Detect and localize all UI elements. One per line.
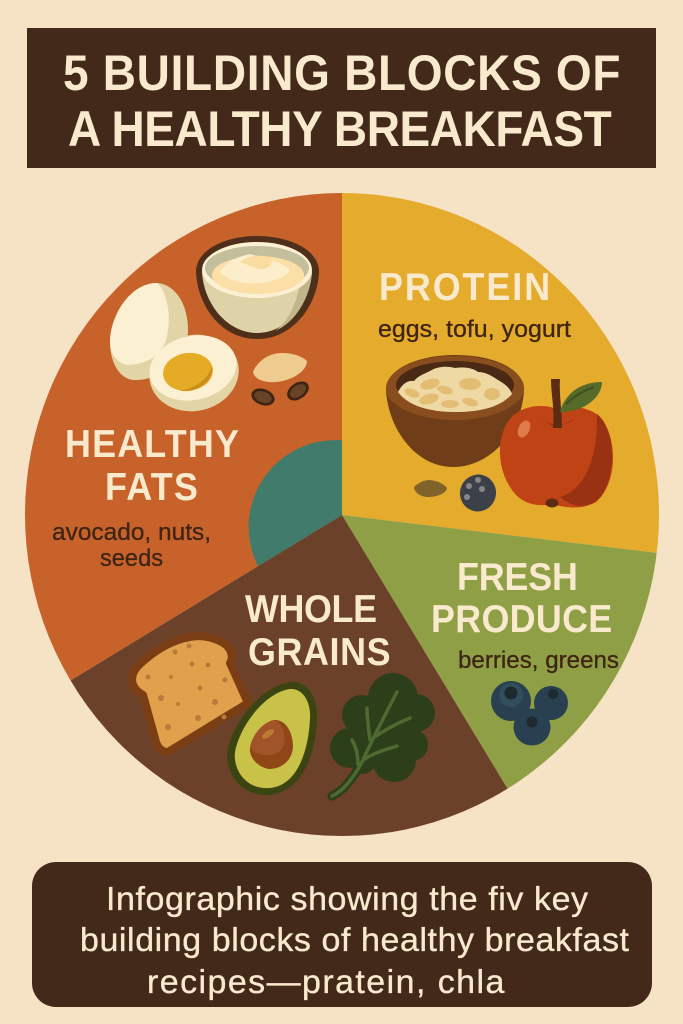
icon: blueberries xyxy=(491,681,568,746)
caption panel: building blocks of healthy breakfast xyxy=(80,922,630,959)
icon: seed and berry xyxy=(414,470,500,516)
heading: healthy fats: HEALTHY xyxy=(65,422,239,465)
heading: fresh produce xyxy=(431,555,612,640)
icon: halved egg xyxy=(142,326,246,420)
heading: whole grains: GRAINS xyxy=(248,630,391,673)
segment: fresh produce xyxy=(342,515,657,789)
heading: protein: PROTEIN xyxy=(379,265,550,308)
heading: whole grains: WHOLE xyxy=(245,587,377,630)
segment: protein xyxy=(342,193,659,553)
text: protein examples: eggs, tofu, yogurt xyxy=(378,316,571,343)
caption panel: recipes—pratein, chla xyxy=(147,964,505,1001)
caption panel xyxy=(32,862,652,1007)
heading: fresh produce: PRODUCE xyxy=(431,597,612,640)
heading: fresh produce: FRESH xyxy=(457,555,578,598)
segment: healthy fats xyxy=(25,193,342,680)
icon: nut and seeds xyxy=(249,353,312,409)
icon: oatmeal bowl xyxy=(386,355,524,467)
pie chart xyxy=(25,193,659,836)
heading: whole grains xyxy=(245,587,391,673)
text: healthy fats examples: avocado, nuts, xyxy=(52,519,211,546)
icon: yogurt bowl xyxy=(196,236,319,339)
icon: toast xyxy=(132,636,248,752)
title banner xyxy=(27,28,656,168)
title banner: A HEALTHY BREAKFAST xyxy=(68,102,612,157)
teal accent segment xyxy=(249,440,342,566)
title banner: 5 BUILDING BLOCKS OF xyxy=(63,46,621,101)
text: healthy fats examples: seeds xyxy=(100,545,163,572)
segment: whole grains xyxy=(70,515,508,836)
icon: avocado xyxy=(227,682,317,795)
icon: apple xyxy=(500,379,613,508)
caption panel: Infographic showing the fiv key xyxy=(106,881,588,918)
text: healthy fats examples xyxy=(52,519,211,572)
heading: healthy fats xyxy=(65,422,239,508)
heading: healthy fats: FATS xyxy=(105,465,198,508)
text: fresh produce examples: berries, greens xyxy=(458,647,619,674)
icon: whole egg xyxy=(110,283,188,380)
icon: spinach leaf xyxy=(330,673,435,796)
